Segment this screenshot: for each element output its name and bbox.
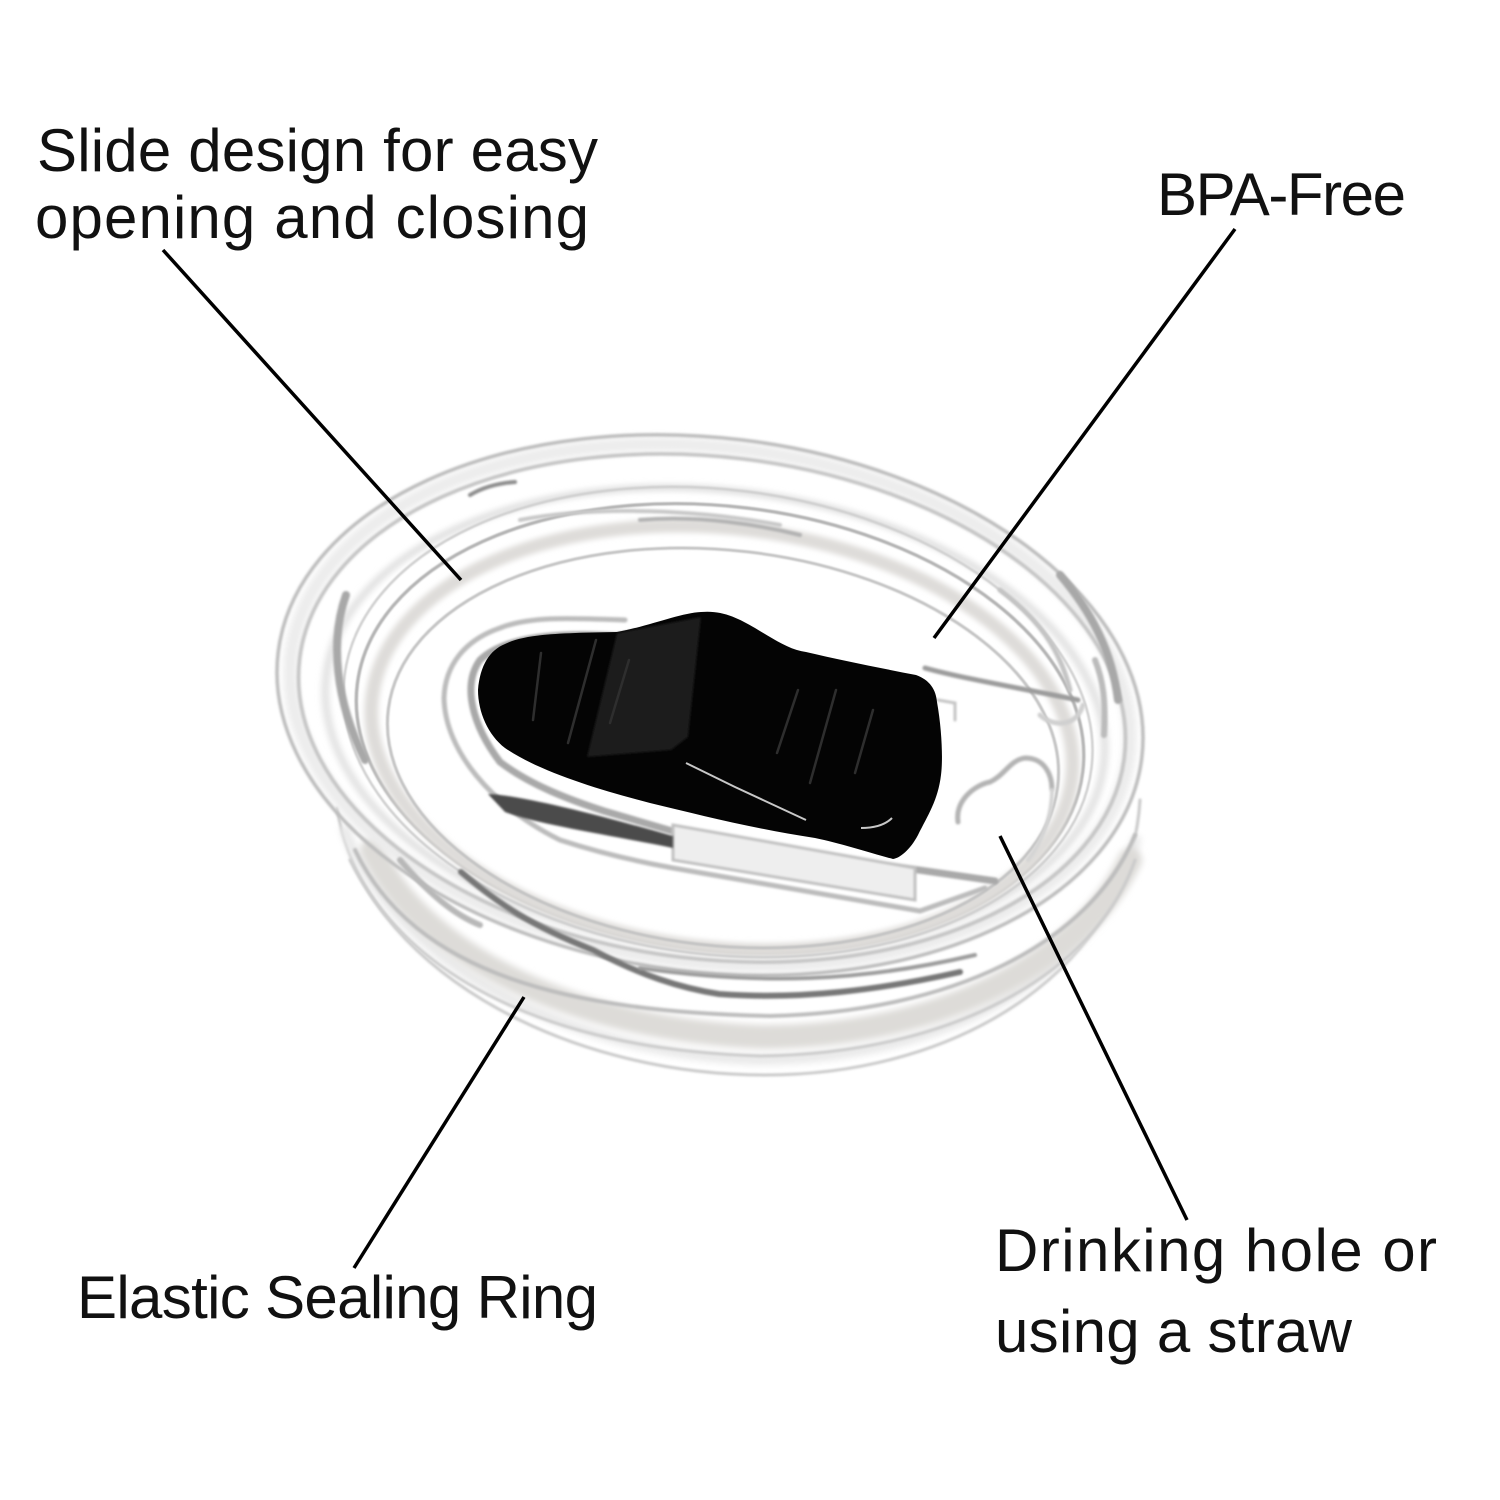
- callout: drinking hole: [995, 836, 1437, 1365]
- label text: Elastic Sealing Ring: [77, 1264, 598, 1331]
- darker rim accents: [337, 482, 1118, 996]
- leader line: [934, 229, 1235, 638]
- lower sealing ring: [337, 800, 1140, 1075]
- label text: Drinking hole or: [995, 1217, 1437, 1284]
- label text: using a straw: [995, 1298, 1353, 1365]
- callout: slide design: [35, 117, 598, 580]
- leader line: [354, 997, 524, 1268]
- callout: BPA-Free: [934, 161, 1406, 638]
- slider track: [444, 618, 1083, 911]
- black slide button: [478, 612, 942, 859]
- shadow under slider: [488, 794, 673, 848]
- callout: sealing ring: [77, 997, 598, 1331]
- inner wall rings: [316, 445, 1120, 999]
- label text: Slide design for easy: [37, 117, 598, 184]
- drinking hole: [958, 758, 1052, 860]
- label text: [35, 117, 598, 251]
- raised button panel: [587, 617, 701, 757]
- leader line: [1000, 836, 1187, 1220]
- leader line: [163, 250, 461, 580]
- label text: BPA-Free: [1157, 161, 1406, 228]
- product: transparent tumbler lid: [246, 387, 1174, 1075]
- label text: opening and closing: [35, 184, 589, 251]
- top rim outer ring: [246, 387, 1174, 1023]
- label text: [995, 1217, 1437, 1365]
- grip ridges: [533, 640, 873, 783]
- button highlights: [686, 763, 892, 828]
